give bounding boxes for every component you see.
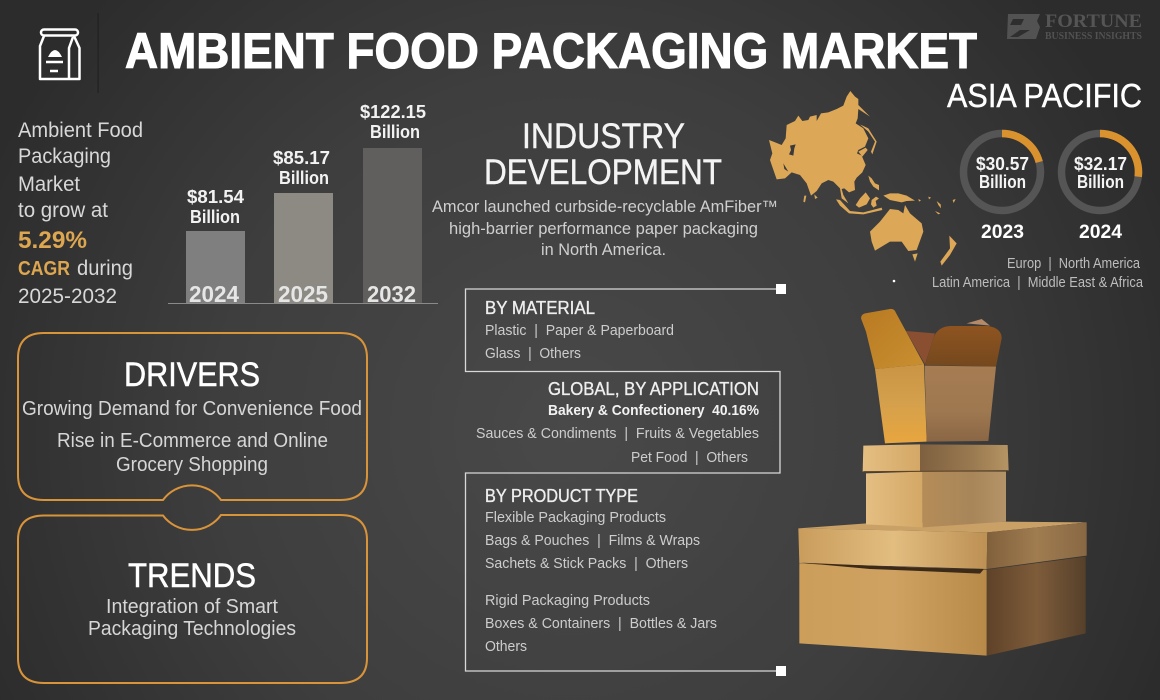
bar values: $81.54 (187, 187, 244, 207)
text block: market growth: Ambient Food (18, 119, 143, 142)
text block: industry development (432, 198, 778, 259)
heading: industry development: DEVELOPMENT (484, 153, 722, 192)
trends list: Packaging Technologies (88, 618, 296, 640)
heading: industry development (484, 117, 722, 192)
donut: 2024: Billion (1077, 172, 1124, 192)
donut: 2024: 2024 (1079, 222, 1122, 243)
map: Asia Pacific (769, 91, 957, 266)
heading: drivers: DRIVERS (124, 356, 260, 394)
panel: by application: Sauces & Condiments | Fruits & Vegetables (476, 425, 759, 442)
donut: 2023: 2023 (981, 222, 1024, 243)
panel outline: trends (18, 515, 367, 683)
panel: trends (18, 515, 367, 683)
heading: trends: TRENDS (128, 557, 256, 595)
panel: by product type: Rigid Packaging Products (485, 592, 650, 609)
trends list (88, 596, 296, 640)
bar labels: 2024 (189, 281, 239, 307)
bar values: Billion (190, 207, 240, 227)
drivers list: Grocery Shopping (116, 454, 268, 476)
panel: by application: Bakery & Confectionery 40.16% (548, 402, 759, 419)
panel: by application (476, 379, 759, 466)
panel: by product type: Others (485, 638, 527, 655)
donut: 2024: $32.17 (1074, 154, 1127, 174)
bar labels (189, 281, 416, 307)
drivers list: Rise in E-Commerce and Online (57, 430, 328, 452)
panel: by material (485, 298, 674, 362)
donut: 2023: Billion (979, 172, 1026, 192)
panel: by product type (485, 486, 717, 655)
panel: by application: GLOBAL, BY APPLICATION (548, 379, 759, 399)
heading: industry development: INDUSTRY (522, 117, 685, 156)
text block: other regions (893, 256, 1144, 291)
drivers list (22, 398, 362, 476)
segmentation frame (466, 284, 786, 676)
text block: market growth (18, 119, 143, 308)
header divider (98, 13, 99, 93)
panel: by product type: Bags & Pouches | Films & Wraps (485, 532, 700, 549)
panel: by material: Plastic | Paper & Paperboard (485, 322, 674, 339)
bar values: $85.17 (273, 148, 330, 168)
panel: drivers (18, 333, 367, 500)
large box (798, 522, 1087, 656)
donut: 2023 (964, 134, 1040, 243)
middle box (863, 444, 1009, 527)
panel: by material: BY MATERIAL (485, 298, 595, 318)
logo: Fortune Business Insights: FORTUNE (1045, 11, 1142, 32)
panel: by product type: Boxes & Containers | Bottles & Jars (485, 615, 717, 632)
bar values (187, 102, 426, 227)
bar labels: 2025 (278, 281, 328, 307)
bar chart: market size (168, 102, 438, 307)
panel: by product type: Flexible Packaging Products (485, 509, 666, 526)
donut: 2023: $30.57 (976, 154, 1029, 174)
logo: Fortune Business Insights (1007, 11, 1142, 42)
heading: Asia Pacific: ASIA PACIFIC (947, 77, 1142, 114)
text block: market growth: 5.29% (18, 227, 87, 254)
bar labels: 2032 (367, 281, 416, 307)
bar 2025 (274, 193, 333, 303)
text block: market growth: to grow at (18, 199, 108, 222)
chart baseline (168, 303, 438, 304)
bar values: $122.15 (360, 102, 426, 122)
panel: by product type: Sachets & Stick Packs | Others (485, 555, 688, 572)
text block: industry development: high-barrier performance paper packaging (449, 220, 758, 238)
text block: industry development: Amcor launched curbside-recyclable AmFiber™ (432, 198, 778, 216)
open takeout box (861, 309, 1002, 443)
text block: market growth: Market (18, 173, 80, 196)
drivers list: Growing Demand for Convenience Food (22, 398, 362, 420)
bar values: Billion (279, 168, 329, 188)
text block: market growth: 2025-2032 (18, 285, 117, 308)
donut: 2024 (1062, 134, 1138, 243)
panel: by application: Pet Food | Others (631, 449, 748, 466)
icon: food bag (40, 30, 80, 79)
text block: market growth: during (77, 257, 133, 280)
text block: market growth: CAGR (18, 258, 70, 280)
title: AMBIENT FOOD PACKAGING MARKET (125, 23, 977, 79)
logo: Fortune Business Insights: BUSINESS INSIGHTS (1045, 31, 1142, 42)
text block: market growth: Packaging (18, 145, 111, 168)
bar 2032 (363, 148, 422, 303)
illustration: stacked cardboard boxes (798, 309, 1087, 656)
panel: by material: Glass | Others (485, 345, 581, 362)
bar values: Billion (370, 122, 420, 142)
text block: industry development: in North America. (541, 241, 666, 259)
panel outline: drivers (18, 333, 367, 500)
bar 2024 (186, 231, 245, 303)
text block: other regions: Europ | North America (1007, 256, 1141, 272)
panel: by product type: BY PRODUCT TYPE (485, 486, 638, 506)
trends list: Integration of Smart (106, 596, 278, 618)
